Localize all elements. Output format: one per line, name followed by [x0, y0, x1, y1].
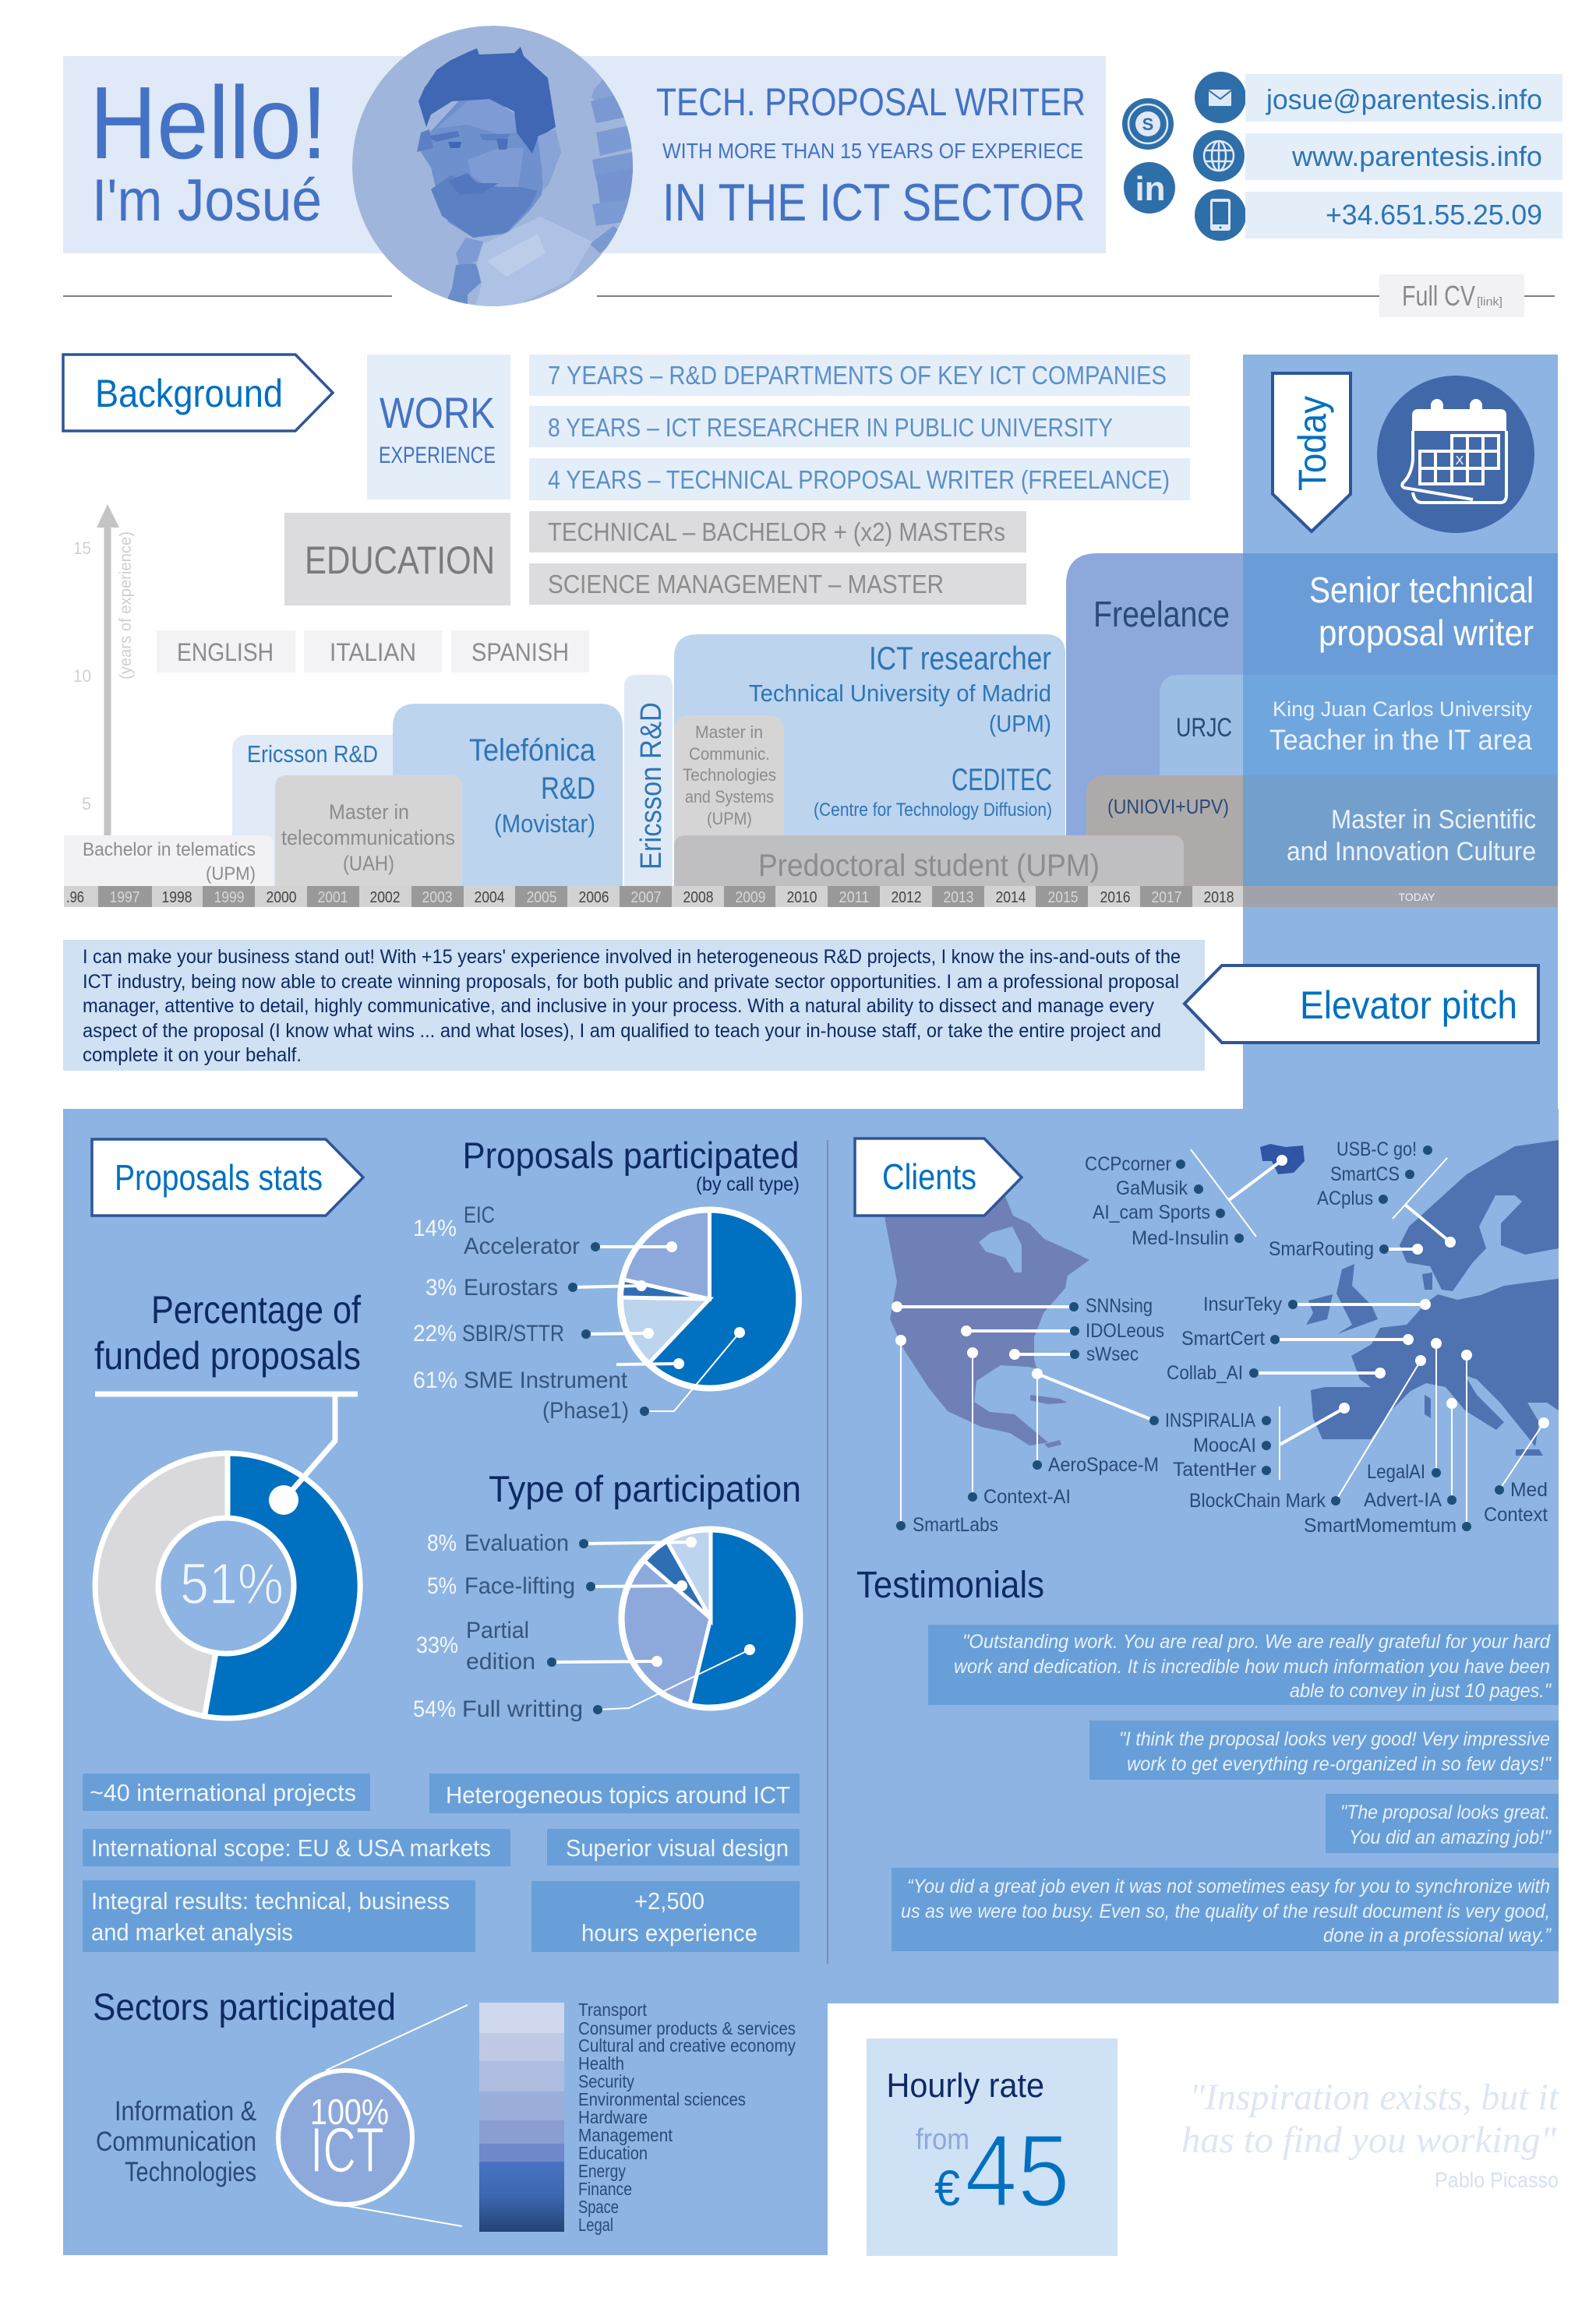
- ict label: Communication: [96, 2127, 256, 2157]
- chart: type of participation: Type of participation: [489, 1468, 801, 1509]
- legend: [413, 1530, 583, 1722]
- client names: SmartMomemtum: [1304, 1515, 1457, 1537]
- work experience: [367, 355, 1190, 500]
- legend: (Phase1): [542, 1398, 629, 1424]
- heading: elevator pitch: Elevator pitch: [1300, 983, 1517, 1027]
- icon: globe: [1193, 130, 1245, 182]
- stat boxes: ~40 international projects: [90, 1779, 356, 1806]
- ict label: [96, 2096, 256, 2187]
- testimonial 4: us as we were too busy. Even so, the quality of the result document is very good,: [901, 1901, 1550, 1922]
- block: master telecommunications: (UAH): [343, 852, 394, 875]
- map: great britain: [1336, 1264, 1378, 1334]
- timeline years: 2004: [474, 889, 505, 906]
- block: master communications: Technologies: [683, 765, 776, 785]
- picasso quote: Pablo Picasso: [1435, 2168, 1559, 2192]
- client names: SmartCert: [1181, 1328, 1265, 1350]
- sector legend: Education: [578, 2143, 648, 2163]
- today descriptions: Teacher in the IT area: [1269, 724, 1532, 756]
- timeline years: 1997: [109, 889, 140, 906]
- contact bars: [1245, 74, 1562, 238]
- stat boxes: hours experience: [581, 1919, 757, 1947]
- client names: SmartLabs: [913, 1514, 998, 1536]
- timeline years: 2018: [1203, 889, 1234, 906]
- contact icons: [1122, 72, 1246, 241]
- testimonial 1: work and dedication. It is incredible how much information you have been: [954, 1656, 1550, 1678]
- block: master telecommunications: telecommunications: [281, 826, 455, 849]
- ict label: Technologies: [125, 2157, 256, 2187]
- map: [882, 1140, 1559, 1456]
- sectors participated: [93, 1987, 796, 2235]
- block: master communications: Master in: [695, 722, 763, 742]
- client names: sWsec: [1086, 1343, 1139, 1365]
- picasso quote: [1181, 2077, 1560, 2192]
- full cv link: [63, 274, 1555, 317]
- heading: clients: [855, 1138, 1022, 1216]
- client names: AeroSpace-M: [1048, 1454, 1159, 1476]
- stat boxes: Superior visual design: [566, 1834, 789, 1862]
- stat boxes: [83, 1774, 800, 1952]
- client names: Advert-IA: [1364, 1489, 1442, 1511]
- block: master telecommunications: Master in: [329, 800, 409, 824]
- map: scandinavia: [1400, 1140, 1559, 1291]
- donut chart: [95, 1453, 360, 1718]
- testimonial 4: [892, 1868, 1559, 1951]
- legend: 5%: [427, 1573, 457, 1599]
- languages: ENGLISH: [177, 638, 274, 666]
- hourly rate: 45: [965, 2113, 1070, 2228]
- timeline years: 1998: [162, 889, 192, 906]
- job title: IN THE ICT SECTOR: [662, 173, 1086, 232]
- block: ericsson: Ericsson R&D: [247, 740, 378, 768]
- legend: Face-lifting: [464, 1573, 575, 1599]
- sector legend: Health: [578, 2053, 624, 2074]
- block: ict researcher: ICT researcher: [869, 640, 1051, 676]
- block: ict researcher: CEDITEC: [952, 763, 1052, 797]
- experience axis: [73, 504, 135, 835]
- client dots: [892, 1145, 1549, 1531]
- stat boxes: International scope: EU & USA markets: [91, 1834, 491, 1862]
- work bars: 7 YEARS – R&D DEPARTMENTS OF KEY ICT COMPANIES: [548, 361, 1167, 390]
- job title: TECH. PROPOSAL WRITER: [656, 80, 1086, 124]
- contact bars: josue@parentesis.info: [1266, 83, 1542, 115]
- ict circle: 100%: [310, 2091, 389, 2132]
- client names: Context-AI: [983, 1486, 1071, 1508]
- client names: TatentHer: [1173, 1459, 1256, 1481]
- map: continental europe: [1311, 1279, 1559, 1446]
- education: [284, 511, 1026, 605]
- timeline years: 1999: [214, 889, 245, 906]
- client names: MoocAI: [1193, 1435, 1256, 1456]
- elevator pitch text: ICT industry, being now able to create winning proposals, for both public and private sector opportunities. I am a professional proposal: [83, 971, 1179, 993]
- experience axis: 15: [73, 538, 91, 558]
- testimonial 2: [1089, 1721, 1559, 1780]
- education bars: [529, 511, 1026, 605]
- block: telefonica: Telefónica: [469, 733, 596, 768]
- greeting: [90, 65, 327, 234]
- timeline years: 2015: [1047, 889, 1079, 906]
- block: telefonica: [393, 704, 623, 886]
- client names: SmarRouting: [1269, 1238, 1374, 1260]
- heading: elevator pitch: [1185, 965, 1538, 1043]
- block: master communications: (UPM): [707, 809, 752, 828]
- work experience: WORK: [380, 388, 495, 437]
- client names: Med-Insulin: [1132, 1227, 1229, 1249]
- client names: CCPcorner: [1085, 1153, 1171, 1175]
- today descriptions: Master in Scientific: [1331, 805, 1536, 835]
- testimonial 3: [1326, 1794, 1559, 1853]
- map: iceland: [1260, 1144, 1305, 1174]
- map: north america: [882, 1196, 1089, 1445]
- sector legend: Finance: [578, 2179, 632, 2199]
- timeline years: 2006: [578, 889, 609, 906]
- timeline years: 2007: [631, 889, 661, 906]
- today descriptions: proposal writer: [1319, 612, 1534, 653]
- greeting: I'm Josué: [92, 168, 322, 234]
- languages: [157, 630, 589, 672]
- heading: background: Background: [95, 372, 283, 415]
- client names: Collab_AI: [1167, 1362, 1243, 1384]
- timeline years: 2010: [787, 889, 817, 906]
- today descriptions: and Innovation Culture: [1287, 837, 1536, 867]
- timeline years: 2012: [892, 889, 921, 906]
- leader lines: [547, 1537, 755, 1714]
- legend: 33%: [416, 1633, 458, 1658]
- block: freelance: [1066, 553, 1243, 886]
- map: hudson bay: [979, 1227, 1022, 1273]
- block: ericsson: [232, 735, 393, 886]
- icon: calendar: X: [1456, 454, 1464, 468]
- timeline years: 2008: [683, 889, 714, 906]
- timeline years: .96: [66, 889, 84, 906]
- career blocks: [64, 553, 1243, 886]
- legend: 3%: [425, 1275, 457, 1301]
- stat boxes: Integral results: technical, business: [91, 1887, 450, 1915]
- block: ict researcher: (UPM): [989, 710, 1051, 737]
- client names: SNNsing: [1086, 1295, 1153, 1317]
- timeline years: [64, 886, 1558, 907]
- legend: SME Instrument: [464, 1368, 628, 1393]
- ict circle: ICT: [310, 2115, 384, 2186]
- greeting: Hello!: [90, 65, 327, 180]
- heading: proposals stats: Proposals stats: [115, 1157, 323, 1198]
- experience axis: 5: [82, 794, 91, 814]
- languages: ITALIAN: [330, 638, 416, 666]
- timeline years: 2017: [1152, 889, 1181, 906]
- timeline years: 2001: [318, 889, 348, 906]
- testimonial 1: "Outstanding work. You are real pro. We are really grateful for your hard: [962, 1631, 1551, 1653]
- testimonial 4: done in a professional way.”: [1323, 1925, 1552, 1947]
- client names: BlockChain Mark: [1189, 1490, 1326, 1512]
- sector legend: Security: [578, 2071, 634, 2091]
- block: uniovi: [1086, 775, 1243, 886]
- work bars: 8 YEARS – ICT RESEARCHER IN PUBLIC UNIVERSITY: [548, 413, 1113, 442]
- client names: SmartCS: [1330, 1163, 1400, 1185]
- work bars: [529, 355, 1190, 500]
- today descriptions: Senior technical: [1309, 570, 1534, 610]
- header banner: [63, 56, 1106, 253]
- job title: [656, 80, 1086, 232]
- client names: GaMusik: [1116, 1177, 1188, 1199]
- legend: edition: [466, 1649, 535, 1675]
- picasso quote: has to find you working": [1181, 2120, 1557, 2161]
- stat boxes: +2,500: [634, 1887, 704, 1915]
- client names: LegalAI: [1367, 1461, 1425, 1483]
- testimonial 1: able to convey in just 10 pages.": [1290, 1680, 1552, 1702]
- picasso quote: "Inspiration exists, but it: [1189, 2077, 1560, 2118]
- icon: linkedin: in: [1135, 170, 1166, 208]
- timeline years: 2002: [369, 889, 401, 906]
- map: denmark: [1422, 1273, 1432, 1290]
- full cv link: [link]: [1477, 295, 1502, 309]
- testimonial 3: "The proposal looks great.: [1340, 1802, 1550, 1823]
- today heading arrow: [1273, 373, 1351, 531]
- block: ict researcher: [674, 634, 1065, 886]
- today descriptions: [1269, 570, 1536, 867]
- full cv link: Full CV: [1402, 280, 1475, 312]
- legend: Full writting: [462, 1696, 583, 1722]
- sector legend: Consumer products & services: [578, 2018, 796, 2038]
- client names: Med: [1510, 1479, 1548, 1501]
- timeline years: 2013: [943, 889, 974, 906]
- legend: SBIR/STTR: [462, 1321, 564, 1347]
- today descriptions: King Juan Carlos University: [1273, 697, 1532, 721]
- block: predoctoral: Predoctoral student (UPM): [758, 849, 1100, 883]
- legend: Evaluation: [464, 1530, 569, 1556]
- icon: calendar: [1377, 376, 1534, 533]
- client names: ACplus: [1317, 1188, 1373, 1209]
- legend: 8%: [427, 1530, 457, 1556]
- job title: WITH MORE THAN 15 YEARS OF EXPERIECE: [662, 139, 1083, 163]
- sector legend: Space: [578, 2197, 619, 2217]
- elevator pitch text: complete it on your behalf.: [83, 1044, 302, 1066]
- sector legend: Environmental sciences: [578, 2089, 746, 2109]
- timeline years: 2005: [527, 889, 556, 906]
- block: bachelor: (UPM): [206, 863, 256, 884]
- heading: proposals stats: [92, 1139, 363, 1216]
- chart: funded proposals: 51%: [180, 1551, 284, 1616]
- ict circle: [278, 2070, 412, 2204]
- contact bars: www.parentesis.info: [1291, 140, 1542, 172]
- client leader lines: [897, 1149, 1544, 1527]
- testimonial 2: work to get everything re-organized in so few days!": [1127, 1753, 1552, 1775]
- chart: proposals participated: Proposals participated: [463, 1135, 800, 1176]
- icon: skype: S: [1142, 115, 1153, 134]
- block: telefonica: R&D: [541, 771, 595, 806]
- hourly rate: [867, 2038, 1118, 2256]
- legend: 54%: [413, 1696, 456, 1722]
- sector legend: Management: [578, 2125, 673, 2145]
- map: caribbean: [1030, 1395, 1068, 1448]
- legend: EIC: [464, 1202, 495, 1228]
- map: ireland: [1306, 1294, 1333, 1325]
- icon: linkedin: [1124, 162, 1175, 214]
- block: master communications: Communic.: [689, 744, 770, 764]
- block: ericsson vertical: [624, 675, 673, 886]
- sector legend: Energy: [578, 2161, 626, 2181]
- elevator pitch text: manager, attentive to detail, highly communicative, and inclusive in your process. With a natural ability to dissect and manage every: [83, 995, 1154, 1017]
- elevator pitch text: [63, 940, 1205, 1071]
- chart: proposals participated: [413, 1135, 800, 1424]
- testimonial 2: "I think the proposal looks very good! Very impressive: [1119, 1728, 1550, 1750]
- timeline years: TODAY: [1399, 891, 1435, 903]
- hourly rate: from: [916, 2123, 969, 2156]
- heading: clients: Clients: [882, 1156, 976, 1197]
- legend: Eurostars: [464, 1275, 558, 1301]
- block: bachelor: Bachelor in telematics: [83, 839, 256, 860]
- block: master communications: and Systems: [685, 787, 774, 807]
- timeline years: 2000: [267, 889, 296, 906]
- legend: 22%: [413, 1321, 457, 1347]
- portrait: [352, 26, 633, 306]
- hourly rate: Hourly rate: [887, 2067, 1044, 2105]
- stat boxes: and market analysis: [91, 1918, 293, 1946]
- block: master telecommunications: [275, 775, 462, 886]
- timeline years: 2016: [1100, 889, 1130, 906]
- block: master communications: [674, 715, 784, 886]
- testimonial 1: [928, 1625, 1559, 1705]
- hourly rate: €: [934, 2160, 960, 2216]
- icon: skype: [1122, 98, 1174, 150]
- icon: phone: [1195, 189, 1246, 241]
- today column: [1243, 355, 1558, 1110]
- sector bar: [479, 2003, 564, 2232]
- block: urjc: [1160, 675, 1243, 886]
- block: uniovi: (UNIOVI+UPV): [1107, 795, 1229, 818]
- client names: IDOLeous: [1086, 1320, 1164, 1342]
- legend: Partial: [466, 1618, 529, 1643]
- elevator pitch text: I can make your business stand out! With +15 years' experience involved in heterogeneous R&D projects, I know the ins-and-outs of the: [83, 946, 1181, 968]
- client names: INSPIRALIA: [1165, 1410, 1255, 1431]
- icon: mail: [1195, 72, 1246, 123]
- work bars: 4 YEARS – TECHNICAL PROPOSAL WRITER (FREELANCE): [548, 465, 1170, 494]
- work experience: EXPERIENCE: [379, 443, 496, 468]
- legend: 61%: [413, 1368, 457, 1393]
- panel: stats and clients: [63, 1109, 1559, 2255]
- sector legend: Transport: [578, 2000, 648, 2020]
- testimonial 3: You did an amazing job!": [1349, 1827, 1552, 1848]
- chart: funded proposals: [94, 1288, 361, 1718]
- sector legend: [578, 2000, 796, 2235]
- pie chart: [619, 1209, 800, 1389]
- education bars: SCIENCE MANAGEMENT – MASTER: [548, 570, 944, 598]
- block: urjc: URJC: [1176, 713, 1232, 743]
- sector legend: Cultural and creative economy: [578, 2035, 796, 2056]
- sector legend: Hardware: [578, 2107, 648, 2127]
- legend: Accelerator: [464, 1234, 580, 1259]
- chart: type of participation: [413, 1468, 801, 1722]
- block: ict researcher: (Centre for Technology Diffusion): [814, 800, 1052, 821]
- timeline years: 2009: [736, 889, 765, 906]
- contact bars: +34.651.55.25.09: [1326, 199, 1542, 231]
- block: ict researcher: Technical University of Madrid: [749, 679, 1051, 707]
- experience axis: 10: [73, 666, 91, 686]
- leader lines: [568, 1241, 745, 1416]
- legend: [413, 1202, 629, 1424]
- pie chart: [620, 1528, 801, 1709]
- timeline years: 2014: [996, 889, 1026, 906]
- client names: InsurTeky: [1203, 1294, 1282, 1315]
- testimonials: Testimonials: [856, 1565, 1044, 1606]
- today heading arrow: Today: [1291, 396, 1334, 491]
- timeline years: 2011: [839, 889, 870, 906]
- sectors participated: Sectors participated: [93, 1987, 396, 2028]
- block: freelance: Freelance: [1093, 594, 1230, 634]
- testimonials: [856, 1565, 1559, 1951]
- heading: background: [63, 355, 333, 431]
- timeline years: 2003: [422, 889, 452, 906]
- block: ericsson vertical: Ericsson R&D: [635, 702, 668, 870]
- elevator pitch text: aspect of the proposal (I know what wins ... and what loses), I am qualified to teach your in-house staff, or take the entire project and: [83, 1020, 1161, 1042]
- client names: USB-C go!: [1336, 1138, 1417, 1160]
- client names: Context: [1484, 1504, 1548, 1526]
- testimonial 4: “You did a great job even it was not sometimes easy for you to synchronize with: [907, 1876, 1550, 1897]
- block: predoctoral: [674, 835, 1184, 886]
- chart: funded proposals: funded proposals: [94, 1334, 361, 1378]
- education bars: TECHNICAL – BACHELOR + (x2) MASTERs: [548, 517, 1005, 546]
- chart: funded proposals: Percentage of: [151, 1288, 361, 1332]
- education: EDUCATION: [305, 538, 495, 582]
- client names: [913, 1138, 1548, 1537]
- stat boxes: Heterogeneous topics around ICT: [446, 1781, 790, 1809]
- sector legend: Legal: [578, 2215, 613, 2235]
- languages: SPANISH: [471, 638, 569, 666]
- legend: 14%: [413, 1216, 457, 1241]
- experience axis: (years of experience): [117, 531, 135, 679]
- block: bachelor: [64, 835, 274, 886]
- chart: proposals participated: (by call type): [696, 1174, 800, 1195]
- block: telefonica: (Movistar): [494, 810, 595, 838]
- zoom lines: [326, 2005, 468, 2226]
- client names: AI_cam Sports: [1093, 1202, 1210, 1223]
- ict label: Information &: [115, 2096, 256, 2127]
